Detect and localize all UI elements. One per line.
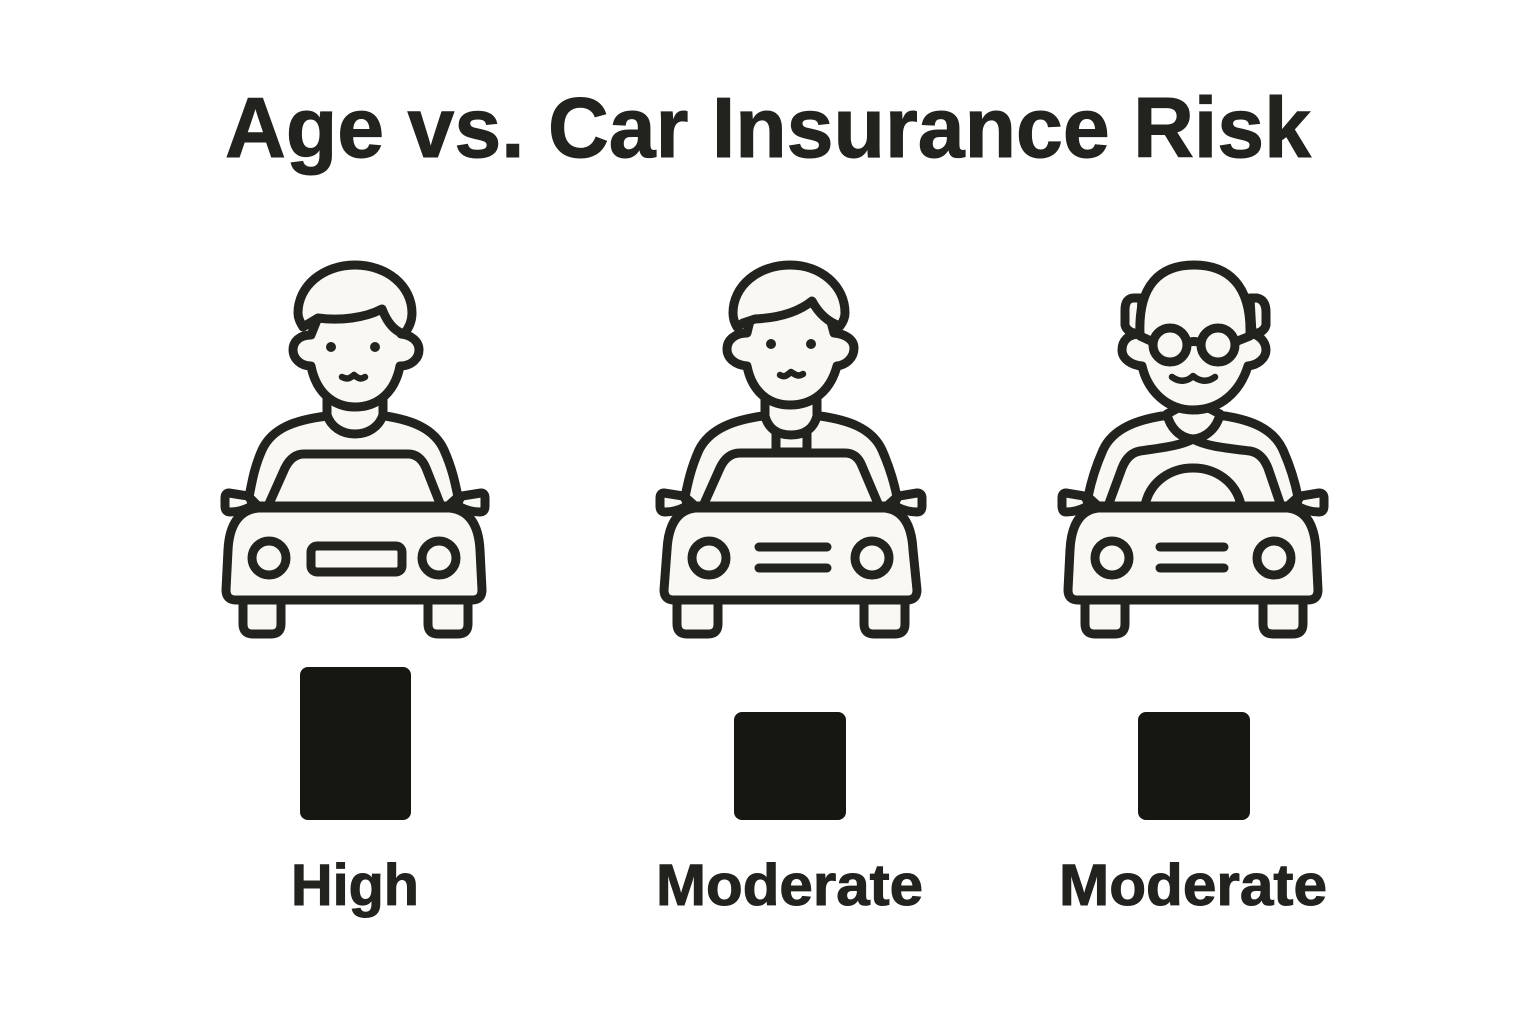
adult driver car mirrors xyxy=(660,493,922,512)
young driver head xyxy=(293,300,419,407)
adult driver car body xyxy=(664,508,917,600)
senior driver torso xyxy=(1088,416,1298,506)
senior driver car wheels xyxy=(1085,600,1303,634)
adult driver neck and collar xyxy=(776,430,807,452)
senior driver head xyxy=(1122,265,1266,410)
bar: high risk xyxy=(300,667,411,820)
title: Age vs. Car Insurance Risk xyxy=(225,81,1312,176)
young driver eyes xyxy=(326,342,380,352)
senior driver arms xyxy=(1108,439,1281,506)
adult driver eyes xyxy=(766,339,816,349)
young driver headlights xyxy=(252,541,456,575)
young driver grille xyxy=(311,546,402,572)
adult driver torso xyxy=(685,416,897,506)
senior driver glasses xyxy=(1140,328,1250,362)
senior driver collar xyxy=(1167,400,1220,439)
senior driver headlights xyxy=(1095,541,1291,575)
young driver neck xyxy=(327,400,383,434)
senior driver grille lines xyxy=(1160,547,1224,568)
young driver hair xyxy=(298,265,412,334)
icon: adult driver in car xyxy=(660,265,922,634)
young driver car body xyxy=(226,508,482,600)
adult driver car wheels xyxy=(677,600,905,634)
adult driver hair xyxy=(733,265,845,327)
senior driver car body xyxy=(1068,508,1318,600)
young driver torso xyxy=(249,416,458,506)
icon: senior driver in car xyxy=(1062,265,1324,634)
senior driver steering wheel xyxy=(1145,468,1241,505)
adult driver mouth xyxy=(780,372,803,376)
label: moderate senior: Moderate xyxy=(1059,853,1327,918)
senior driver car mirrors xyxy=(1062,493,1324,512)
icon: young driver in car xyxy=(225,265,485,634)
senior driver side hair xyxy=(1125,298,1266,334)
young driver car wheels xyxy=(243,600,468,634)
adult driver windshield xyxy=(703,453,879,506)
label: high: High xyxy=(291,853,419,918)
young driver mouth xyxy=(342,375,365,378)
senior driver mouth xyxy=(1172,376,1215,381)
adult driver neck xyxy=(765,400,817,435)
bar: moderate risk adult xyxy=(734,712,846,820)
adult driver headlights xyxy=(692,541,889,575)
young driver car mirrors xyxy=(225,493,485,512)
label: moderate adult: Moderate xyxy=(656,853,923,918)
adult driver grille lines xyxy=(759,547,827,568)
bar: moderate risk senior xyxy=(1138,712,1250,820)
young driver windshield xyxy=(268,454,441,506)
adult driver head xyxy=(727,300,854,405)
